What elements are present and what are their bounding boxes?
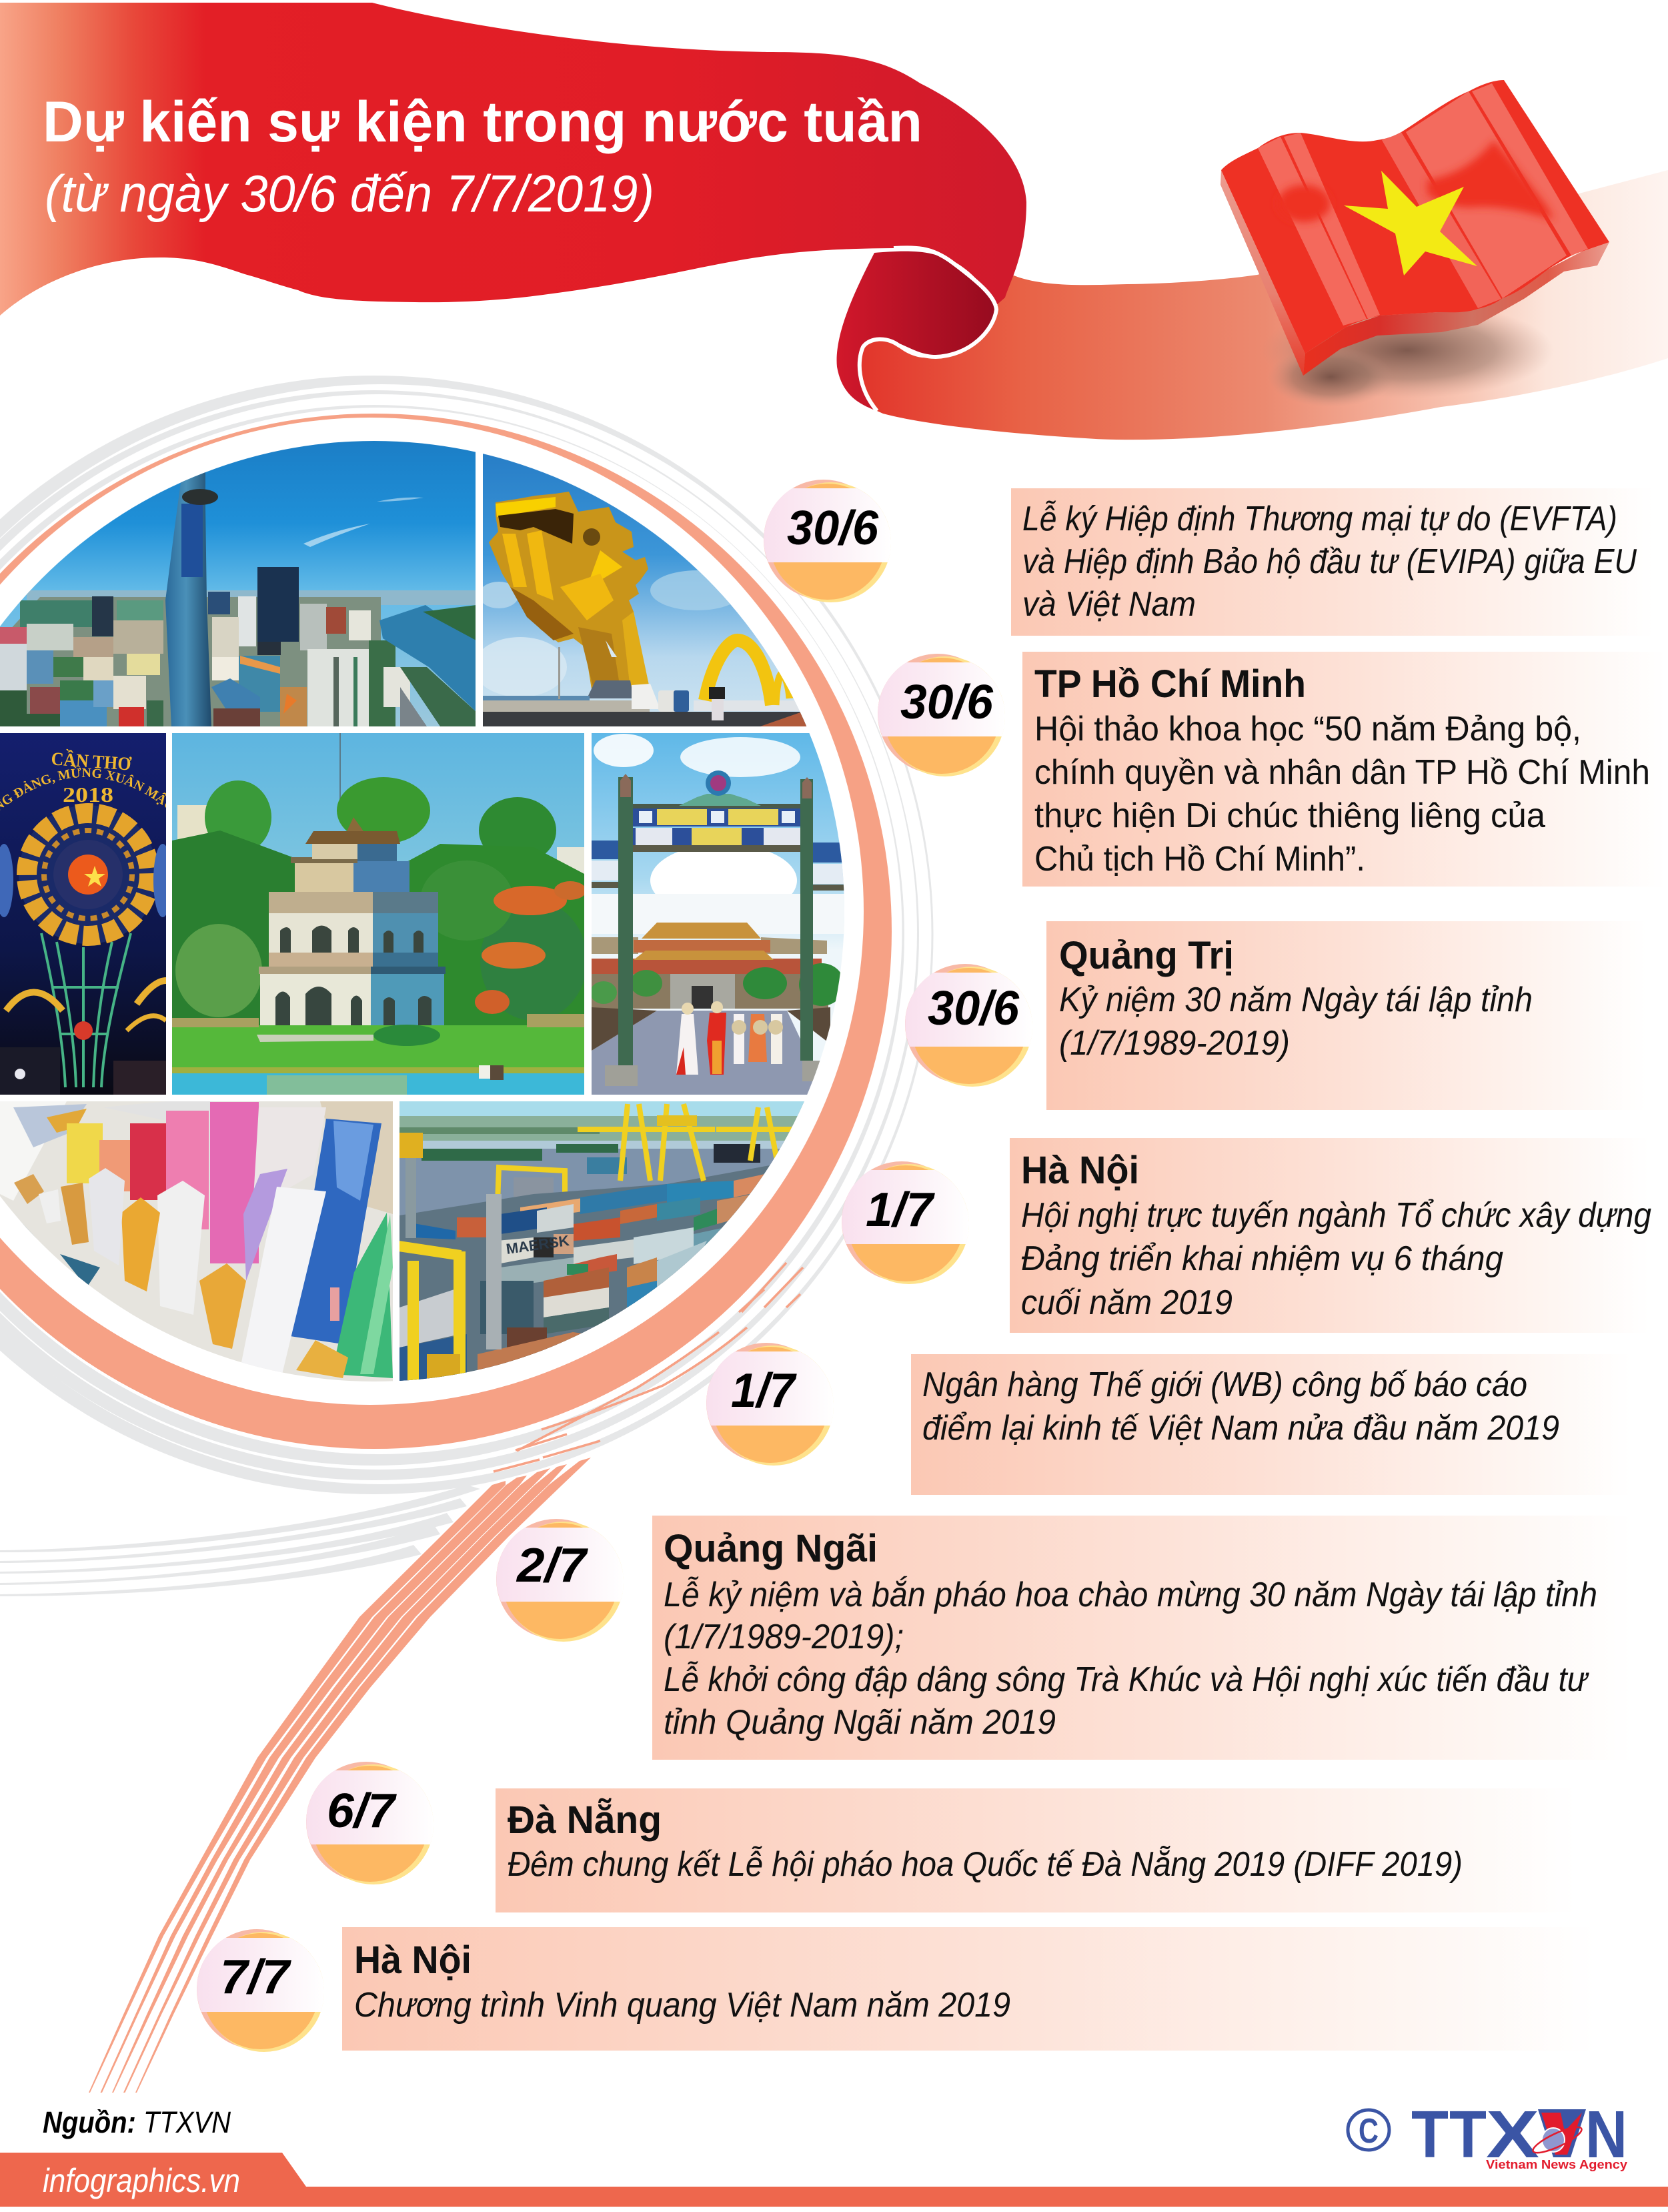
event text: Lễ khởi công đập dâng sông Trà Khúc và Hội nghị xúc tiến đầu tư xyxy=(664,1660,1589,1699)
date badge 2/7 xyxy=(496,1519,624,1642)
date badge 7/7: 7/7 xyxy=(220,1951,291,2004)
date badge 30/6 xyxy=(878,654,1005,776)
logo: TTXVN Vietnam News Agency xyxy=(1411,2097,1627,2172)
date badge 30/6 xyxy=(905,964,1032,1087)
logo: TTXVN Vietnam News Agency: N xyxy=(1585,2097,1627,2172)
dark ribbon fold xyxy=(837,251,996,411)
flag face xyxy=(1221,80,1609,354)
star xyxy=(1344,171,1477,275)
event panel 4: Ha Noi xyxy=(1010,1138,1651,1333)
event text xyxy=(1059,981,1533,1063)
heading: Quảng Ngãi xyxy=(664,1527,878,1570)
logo: TTXVN Vietnam News Agency: Vietnam News Agency xyxy=(1486,2158,1627,2171)
top banner ribbon xyxy=(0,3,1668,440)
date badge 2/7: 2/7 xyxy=(516,1539,588,1592)
white fold outline xyxy=(860,247,996,411)
event text xyxy=(1034,710,1650,879)
salmon tail of the ring, five strips xyxy=(89,1458,591,2093)
flag shadow xyxy=(1261,302,1554,407)
event text: Kỷ niệm 30 năm Ngày tái lập tỉnh xyxy=(1059,981,1533,1019)
event panel 6: Quang Ngai xyxy=(652,1516,1633,1760)
photo: Da Nang dragon bridge xyxy=(483,454,807,726)
salmon ring around photo circle xyxy=(0,414,892,1449)
date badge 30/6 xyxy=(764,480,891,602)
event panel 7: Da Nang xyxy=(496,1788,1576,1912)
event text: điểm lại kinh tế Việt Nam nửa đầu năm 2019 xyxy=(922,1409,1559,1448)
event text xyxy=(664,1576,1597,1742)
date badge 6/7 xyxy=(306,1762,434,1884)
event text: Đảng triển khai nhiệm vụ 6 tháng xyxy=(1021,1239,1503,1278)
event text xyxy=(1021,1196,1651,1322)
heading: Hà Nội xyxy=(1021,1149,1139,1192)
date badge 1/7 xyxy=(842,1161,969,1284)
subtitle: (từ ngày 30/6 đến 7/7/2019) xyxy=(45,164,654,223)
icon: Vietnamese flag xyxy=(1214,73,1614,407)
lower ribbon band xyxy=(858,170,1668,440)
event panel 8: Ha Noi xyxy=(342,1927,1596,2051)
date badge 30/6: 30/6 xyxy=(928,982,1020,1035)
date badge 30/6: 30/6 xyxy=(787,502,879,555)
photo: Can Tho festive light display: 2018 xyxy=(63,782,113,806)
icon: copyright mark xyxy=(1348,2110,1389,2151)
event panel 1 xyxy=(1011,488,1654,636)
event text: Chương trình Vinh quang Việt Nam năm 2019 xyxy=(354,1986,1010,2025)
upper red banner xyxy=(0,3,1026,316)
heading: Hà Nội xyxy=(354,1939,472,1982)
date badge 30/6: 30/6 xyxy=(900,676,994,729)
event panel 3: Quang Tri xyxy=(1046,921,1647,1110)
salmon streaks on the grey rings xyxy=(494,1263,803,1472)
photo: Turtle Tower on Hoan Kiem lake xyxy=(172,733,587,1095)
event text: tỉnh Quảng Ngãi năm 2019 xyxy=(664,1703,1056,1742)
event text: và Việt Nam xyxy=(1022,585,1196,624)
event text: cuối năm 2019 xyxy=(1021,1283,1232,1322)
event text: Lễ kỷ niệm và bắn pháo hoa chào mừng 30 năm Ngày tái lập tỉnh xyxy=(664,1576,1597,1614)
event text: Ngân hàng Thế giới (WB) công bố báo cáo xyxy=(922,1365,1527,1404)
event text: thực hiện Di chúc thiêng liêng của xyxy=(1034,796,1545,835)
heading: TP Hồ Chí Minh xyxy=(1034,662,1306,706)
photo collage circle xyxy=(0,441,882,1381)
date badge 6/7: 6/7 xyxy=(327,1784,397,1838)
event text xyxy=(922,1365,1559,1448)
event text: (1/7/1989-2019); xyxy=(664,1618,904,1656)
date badge 1/7: 1/7 xyxy=(731,1364,797,1418)
photo: container port: MAERSK xyxy=(505,1232,570,1257)
logo: TTXVN Vietnam News Agency: T xyxy=(1449,2097,1487,2172)
footer band xyxy=(0,2153,1668,2207)
flag extruded side xyxy=(1303,242,1609,376)
event text xyxy=(1022,500,1637,624)
photo: Ho Chi Minh City skyline xyxy=(0,414,476,727)
event panel 2: TP Ho Chi Minh xyxy=(1022,652,1666,887)
photo: 3D colourful bar chart xyxy=(0,1101,393,1388)
event text: chính quyền và nhân dân TP Hồ Chí Minh xyxy=(1034,753,1650,792)
heading: Đà Nẵng xyxy=(508,1798,662,1842)
website label: infographics.vn xyxy=(43,2162,240,2199)
grey swoosh lines flowing to the left edge xyxy=(0,1485,480,1596)
flag left side xyxy=(1220,170,1305,376)
event panel 5: World Bank xyxy=(911,1354,1631,1495)
icon: copyright mark: C xyxy=(1359,2112,1379,2151)
photo: container port xyxy=(399,1101,804,1381)
event text: Chủ tịch Hồ Chí Minh”. xyxy=(1034,840,1365,879)
title: Dự kiến sự kiện trong nước tuần xyxy=(43,90,922,154)
event text: (1/7/1989-2019) xyxy=(1059,1024,1290,1063)
event text: Đêm chung kết Lễ hội pháo hoa Quốc tế Đà Nẵng 2019 (DIFF 2019) xyxy=(508,1845,1463,1884)
date badge 1/7 xyxy=(706,1343,834,1466)
source note: Nguồn: TTXVN xyxy=(43,2105,231,2139)
date badge 7/7 xyxy=(197,1929,324,2052)
photo: Hue imperial citadel gate xyxy=(590,733,852,1095)
logo: TTXVN Vietnam News Agency: T xyxy=(1411,2097,1449,2172)
event text: Hội thảo khoa học “50 năm Đảng bộ, xyxy=(1034,710,1581,748)
photo: Can Tho festive light display xyxy=(0,733,166,1095)
date badge 1/7: 1/7 xyxy=(866,1183,935,1237)
photo: Can Tho festive light display: CẦN THƠ xyxy=(51,748,133,775)
decorative background: grey rings behind photo circle xyxy=(0,376,934,1494)
logo: TTXVN Vietnam News Agency: X xyxy=(1486,2097,1539,2172)
heading: Quảng Trị xyxy=(1059,934,1234,977)
